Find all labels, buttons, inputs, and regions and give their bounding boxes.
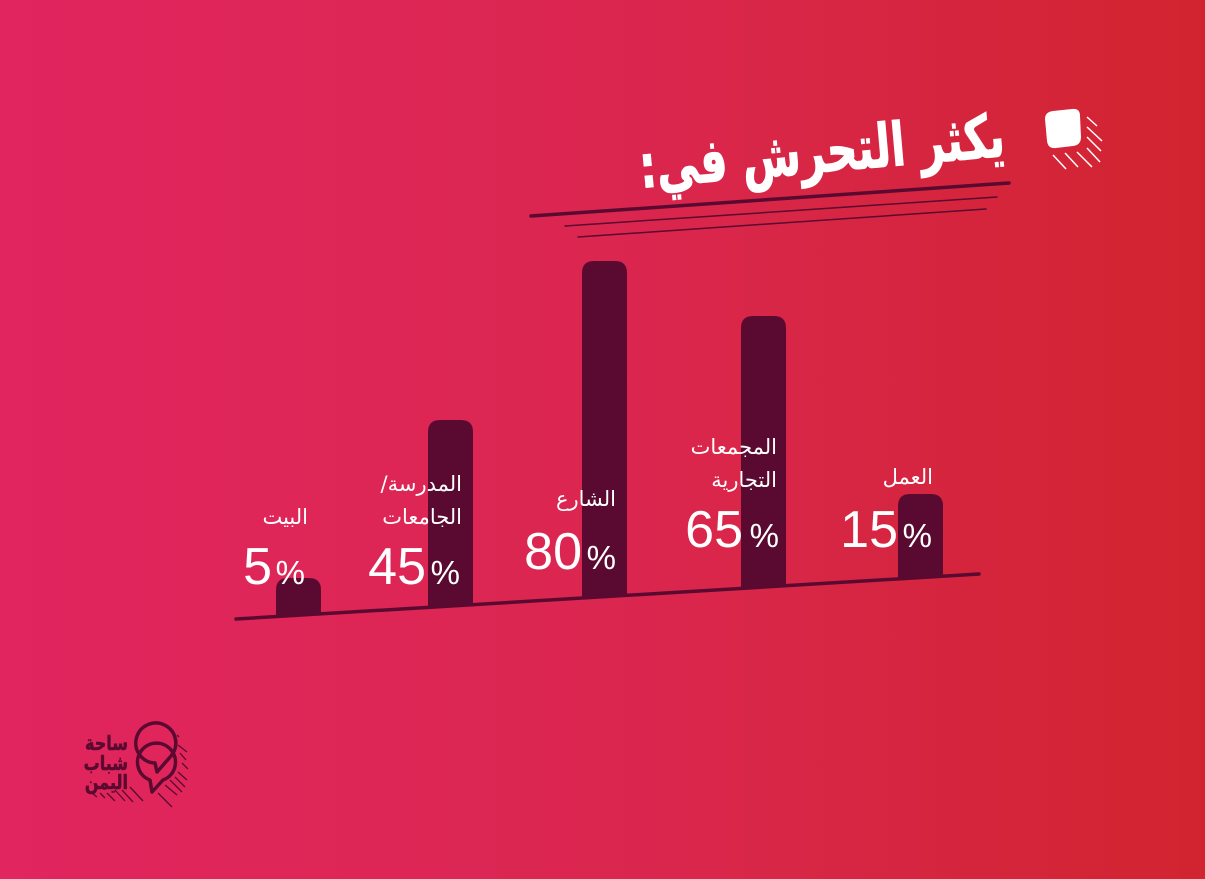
label: work: العمل [883, 465, 933, 489]
label: school / university: المدرسة/ [381, 472, 462, 496]
title: يكثر التحرش في: [636, 102, 1007, 203]
label: school / university: % [431, 554, 460, 591]
label: shopping malls [685, 435, 779, 559]
label: school / university [368, 472, 462, 596]
logo hatching [92, 735, 188, 807]
label: home: 5 [243, 538, 272, 596]
label: school / university: 45 [368, 538, 426, 596]
label: shopping malls: المجمعات [691, 435, 777, 459]
title underlines [531, 183, 1009, 237]
label: street: الشارع [556, 487, 616, 511]
logo wordmark: ساحة [85, 732, 128, 756]
bar: school 45% [428, 420, 473, 608]
label: home: البيت [262, 505, 308, 529]
bar: malls 65% [741, 316, 786, 589]
logo [84, 723, 188, 807]
label: work: 15 [840, 501, 898, 559]
bar chart [236, 261, 979, 619]
label: street: % [587, 539, 616, 576]
bar: work 15% [898, 494, 943, 579]
label: shopping malls: 65 [685, 501, 743, 559]
label: home [243, 505, 308, 596]
logo wordmark [84, 732, 128, 795]
logo wordmark: شباب [84, 752, 128, 776]
logo icon: speech bubbles [136, 723, 176, 792]
label: street [524, 487, 616, 581]
label: school / university: الجامعات [382, 505, 462, 529]
bar: street 80% [582, 261, 627, 598]
label: work: % [903, 517, 932, 554]
label: home: % [276, 554, 305, 591]
bar: home 5% [276, 578, 321, 617]
logo wordmark: اليمن [85, 771, 128, 795]
label: shopping malls: التجارية [711, 468, 777, 492]
baseline [236, 574, 979, 619]
label: shopping malls: % [750, 517, 779, 554]
label: street: 80 [524, 523, 582, 581]
label: work [840, 465, 933, 559]
icon: title bullet [1045, 109, 1102, 169]
